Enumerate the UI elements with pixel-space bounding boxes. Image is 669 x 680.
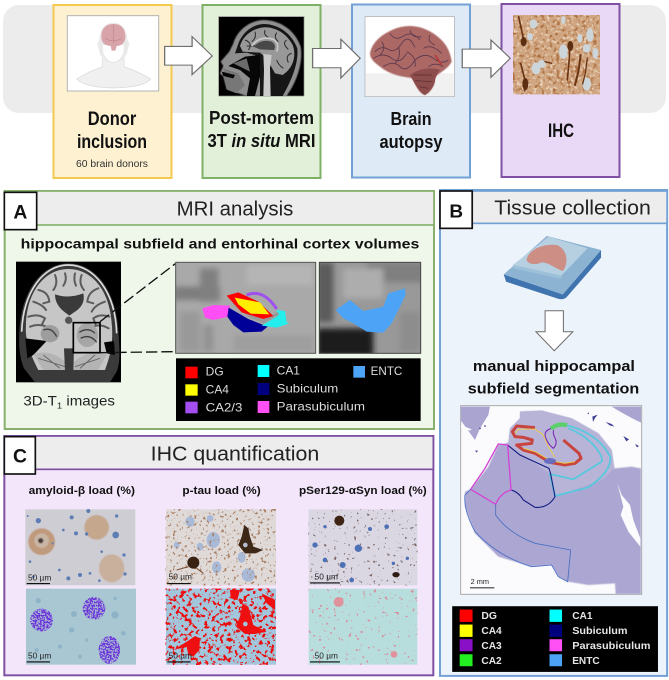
label: Post-mortem 3T in situ MRI: Post-mortem <box>209 108 314 128</box>
badge B: B <box>449 200 463 221</box>
label: Donor inclusion: inclusion <box>77 132 147 153</box>
legend: section segmentation: CA4 <box>481 626 502 637</box>
legend: section segmentation: CA1 <box>572 611 593 622</box>
badge A <box>4 192 37 230</box>
step: IHC <box>502 4 620 177</box>
legend: MRI segmentation <box>176 358 421 421</box>
column title: pSer129-αSyn: pSer129-αSyn load (%) <box>299 485 427 497</box>
label: Brain autopsy <box>380 109 442 152</box>
micrograph: amyloid-β quantification mask: 50 µm <box>28 651 51 661</box>
step: donor inclusion <box>54 5 172 178</box>
caption: 3D-T1 images: 3D-T <box>23 394 54 409</box>
arrow: donor to MRI <box>165 37 212 75</box>
image: entorhinal cortex segmentation <box>317 262 423 357</box>
micrograph: αSyn quantification mask: 50 µm <box>315 651 338 661</box>
step: brain autopsy <box>352 4 470 178</box>
panel B: tissue collection <box>440 190 667 676</box>
label: IHC: IHC <box>548 121 574 142</box>
legend: MRI segmentation: CA1 <box>277 364 300 377</box>
legend: MRI segmentation: ENTC <box>371 365 402 378</box>
column title: amyloid-β: amyloid-β load (%) <box>29 485 135 497</box>
micrograph: amyloid-β quantification mask <box>26 589 136 665</box>
heading: Tissue collection: Tissue collection <box>494 197 651 219</box>
micrograph: amyloid-β stain: 50 µm <box>28 572 51 582</box>
legend: MRI segmentation: Subiculum <box>277 382 338 395</box>
label: Donor inclusion: 60 brain donors <box>76 159 148 170</box>
icon: tissue slide <box>504 236 601 299</box>
image: hippocampal segmentation <box>173 262 316 353</box>
micrograph: p-tau stain: 50 µm <box>169 572 192 582</box>
dashed zoom lines <box>100 264 175 353</box>
micrograph: αSyn stain: 50 µm <box>315 572 338 582</box>
micrograph: p-tau quantification mask <box>166 589 276 665</box>
badge C: C <box>13 447 27 468</box>
badge B <box>440 191 472 228</box>
legend: section segmentation: Parasubiculum <box>572 641 651 652</box>
micrograph: αSyn quantification mask <box>309 589 417 665</box>
step: post-mortem MRI <box>202 5 320 178</box>
legend: section segmentation: CA3 <box>481 641 502 652</box>
subtitle: hippocampal subfield and entorhinal cortex volumes <box>21 235 420 251</box>
legend: MRI segmentation: Parasubiculum <box>277 401 365 414</box>
label: Brain autopsy: Brain <box>390 109 432 129</box>
label: Donor inclusion: Donor <box>88 109 137 130</box>
heading: IHC quantification: IHC quantification <box>151 444 319 466</box>
image: IHC micrograph <box>513 15 600 94</box>
badge A: A <box>13 202 27 223</box>
micrograph: p-tau stain <box>166 509 276 585</box>
micrograph: p-tau quantification mask: 50 µm <box>169 651 192 661</box>
label: Post-mortem 3T in situ MRI <box>208 108 316 151</box>
arrow: autopsy to IHC <box>462 40 510 77</box>
micrograph: αSyn stain <box>309 509 417 585</box>
column title: p-tau: p-tau load (%) <box>182 485 261 497</box>
process band <box>3 5 666 113</box>
badge C <box>4 437 35 474</box>
label: Brain autopsy: autopsy <box>380 132 442 152</box>
subtitle: manual hippocampal subfield segmentation: subfield segmentation <box>468 382 639 397</box>
label: Donor inclusion <box>76 109 148 170</box>
subtitle: manual hippocampal subfield segmentation: manual hippocampal <box>473 359 635 375</box>
caption: 3D-T1 images: 1 <box>57 400 62 410</box>
legend: section segmentation: Subiculum <box>572 626 628 637</box>
caption: 3D-T1 images: images <box>62 394 115 409</box>
image: sagittal MRI <box>219 17 304 96</box>
panel C: IHC quantification <box>4 436 433 675</box>
legend: section segmentation <box>452 606 658 672</box>
zoom box <box>73 323 100 353</box>
image: hippocampal section <box>461 406 642 594</box>
image: hippocampal section: 2 mm <box>471 577 489 586</box>
legend: section segmentation: ENTC <box>572 656 600 667</box>
legend: MRI segmentation: CA2/3 <box>206 402 242 415</box>
micrograph: amyloid-β stain <box>25 509 135 585</box>
icon: donor head and brain <box>67 16 159 91</box>
image: autopsy brain photo <box>365 17 454 97</box>
subtitle: manual hippocampal subfield segmentation <box>468 359 639 397</box>
legend: section segmentation: DG <box>481 611 497 622</box>
legend: section segmentation: CA2 <box>481 656 502 667</box>
legend: MRI segmentation: CA4 <box>206 383 230 396</box>
image: coronal T1 MRI <box>16 262 121 382</box>
legend: MRI segmentation: DG <box>206 366 224 379</box>
heading: MRI analysis: MRI analysis <box>177 199 293 221</box>
label: Post-mortem 3T in situ MRI: 3T in situ MRI <box>208 131 316 151</box>
arrow: MRI to autopsy <box>313 39 360 78</box>
panel A: MRI analysis <box>4 191 434 429</box>
arrow: down to segmentation <box>536 311 573 351</box>
